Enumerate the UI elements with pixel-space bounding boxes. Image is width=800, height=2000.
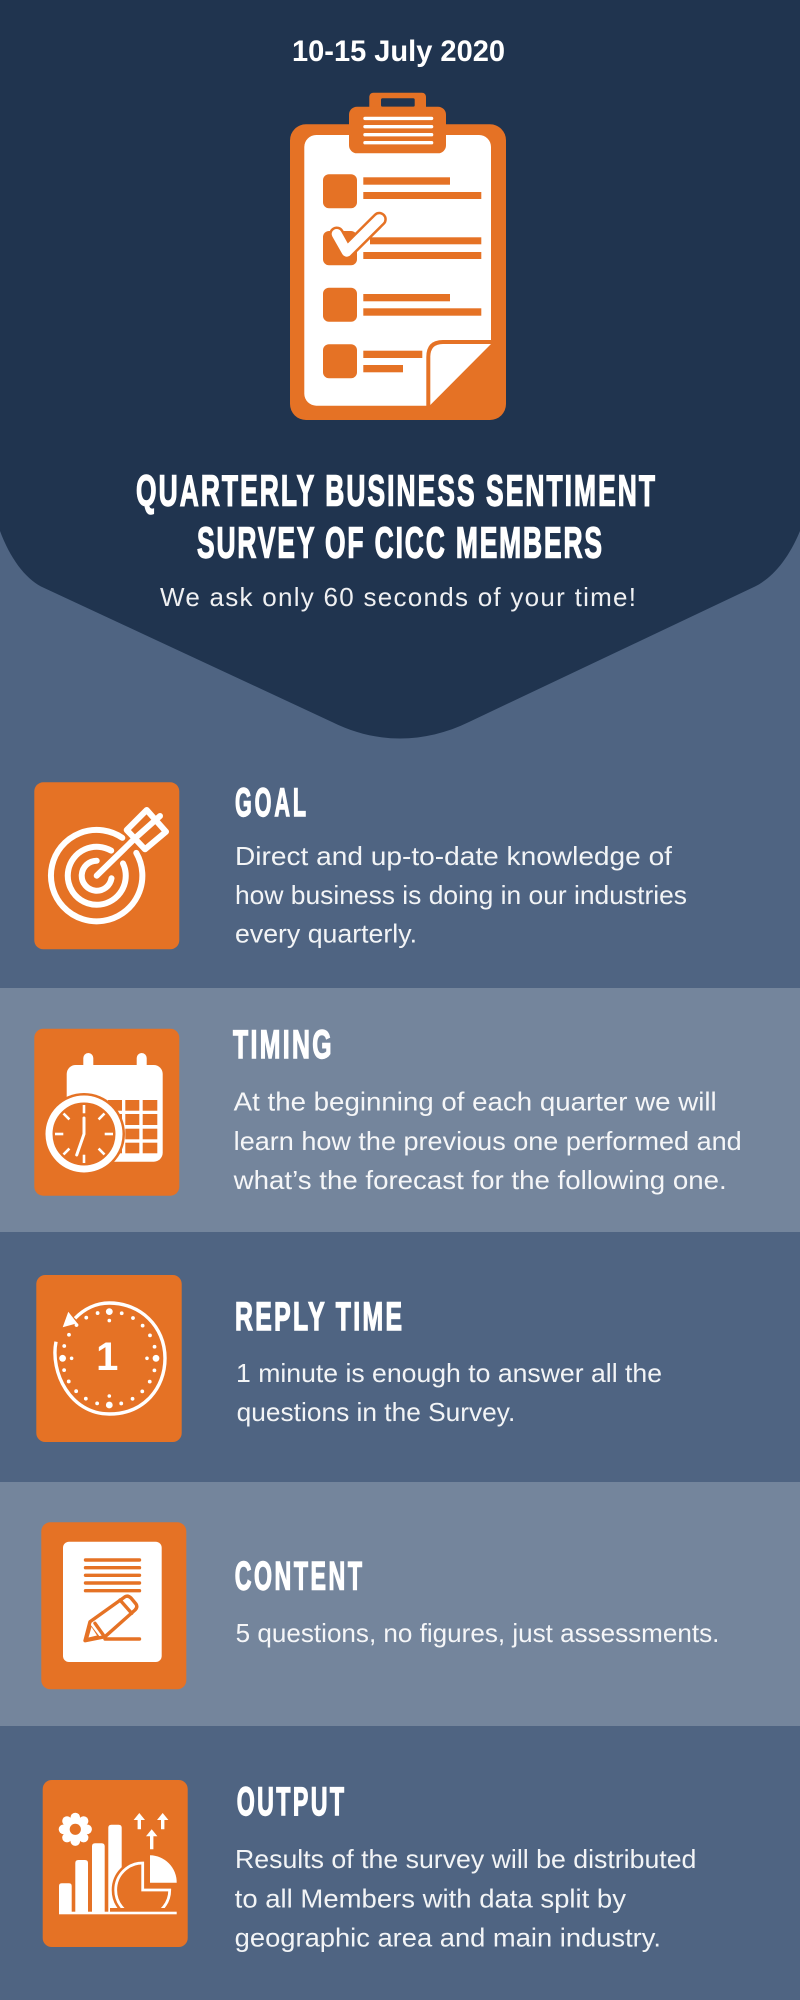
heading: GOAL — [235, 780, 306, 825]
body text: every quarterly. — [235, 919, 417, 949]
icon: one minute countdown clock: 1 — [96, 1335, 118, 1379]
body text: questions in the Survey. — [237, 1397, 515, 1427]
body text: geographic area and main industry. — [235, 1923, 661, 1953]
panel: timing — [0, 988, 800, 1232]
title: QUARTERLY BUSINESS SENTIMENT — [136, 465, 655, 515]
title: SURVEY OF CICC MEMBERS — [197, 517, 602, 567]
pie chart — [59, 1855, 178, 1922]
body text: to all Members with data split by — [235, 1884, 626, 1914]
body text: how business is doing in our industries — [235, 880, 687, 910]
body text: Results of the survey will be distributed — [235, 1844, 696, 1874]
icon: document and pencil — [41, 1522, 186, 1689]
icon: charts, gear and arrows — [43, 1780, 188, 1947]
body text: At the beginning of each quarter we will — [234, 1087, 717, 1117]
body text: learn how the previous one performed and — [234, 1126, 742, 1156]
arrows — [134, 1813, 168, 1849]
icon: calendar and clock — [34, 1029, 179, 1196]
subtitle: We ask only 60 seconds of your time! — [160, 582, 636, 612]
body text: what’s the forecast for the following one. — [233, 1165, 727, 1195]
body text — [235, 1844, 696, 1953]
heading: REPLY TIME — [235, 1295, 402, 1340]
body text — [236, 1358, 662, 1427]
panel: goal — [34, 780, 687, 949]
date: 10-15 July 2020 — [292, 35, 505, 68]
gear — [59, 1813, 92, 1846]
heading: OUTPUT — [237, 1778, 344, 1823]
body text — [233, 1087, 742, 1195]
body text: 5 questions, no figures, just assessments. — [236, 1618, 719, 1648]
heading: CONTENT — [235, 1553, 362, 1598]
title — [136, 465, 655, 567]
body text — [235, 841, 687, 949]
icon: clipboard checklist — [290, 93, 506, 420]
panel: reply time — [36, 1275, 662, 1442]
header banner — [0, 0, 800, 738]
body text: 1 minute is enough to answer all the — [236, 1358, 662, 1388]
icon: target with arrow — [34, 782, 179, 949]
panel: output — [43, 1778, 696, 1953]
icon: one minute countdown clock — [36, 1275, 182, 1442]
body text: Direct and up-to-date knowledge of — [235, 841, 673, 871]
panel: content — [0, 1482, 800, 1726]
heading: TIMING — [233, 1023, 332, 1067]
